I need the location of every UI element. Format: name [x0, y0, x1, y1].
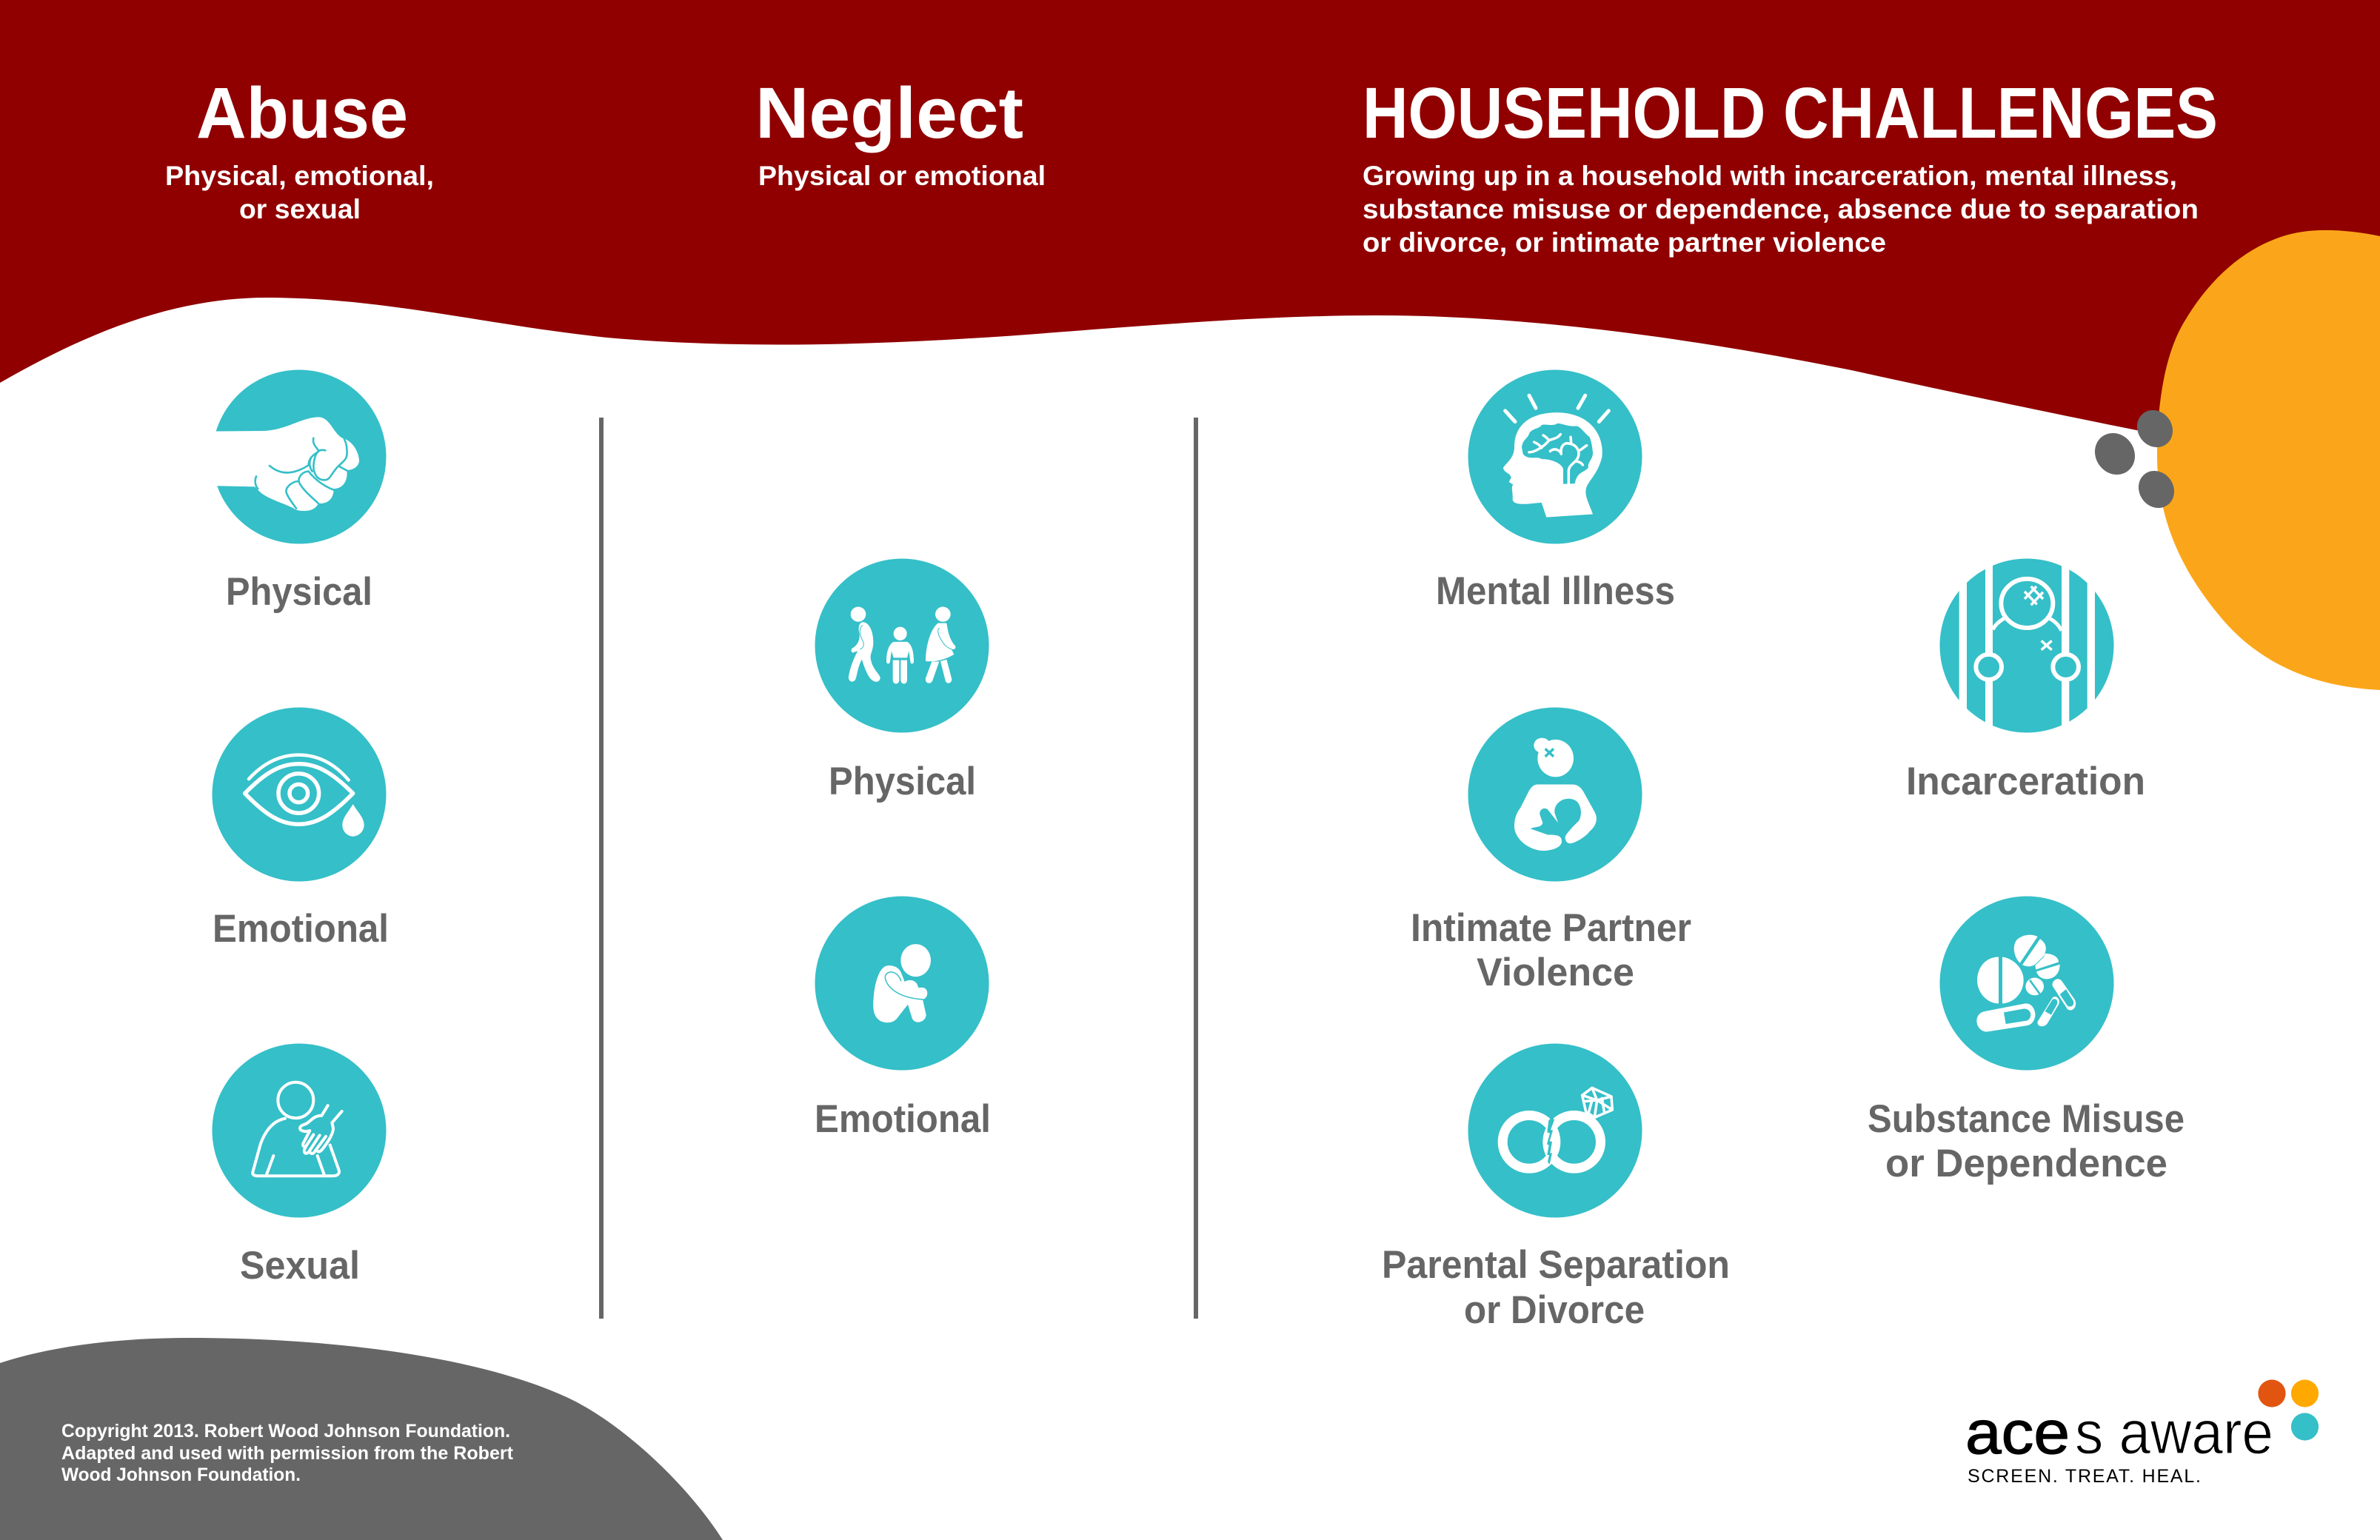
- abuse: sexual: [212, 1044, 387, 1288]
- red header wave: [0, 0, 2380, 444]
- orange blob: [2157, 230, 2380, 690]
- heading: Abuse: [165, 73, 434, 224]
- household: incarceration: [1906, 554, 2145, 803]
- grey dots: [2087, 404, 2182, 515]
- abuse: emotional: [212, 708, 389, 951]
- icon: injured mother holding child: [1468, 708, 1642, 881]
- label: Parental Separation: [1382, 1243, 1730, 1287]
- neglect: emotional: [815, 896, 991, 1141]
- heading: Abuse: or sexual: [239, 194, 361, 224]
- label: Substance Misuse: [1868, 1097, 2185, 1141]
- heading: Neglect: Neglect: [755, 73, 1023, 153]
- icon: walking family: [815, 558, 989, 733]
- abuse: physical: [207, 370, 387, 614]
- icon: person with hand on shoulder: [212, 1044, 387, 1217]
- label: Physical: [226, 570, 372, 614]
- logo dots: [2258, 1379, 2319, 1441]
- icon: person behind bars: [1940, 554, 2113, 734]
- household: substance misuse: [1868, 896, 2185, 1185]
- icon: fist: [207, 370, 387, 543]
- label: Mental Illness: [1436, 569, 1675, 613]
- heading: Household Challenges: HOUSEHOLD CHALLENGES: [1363, 73, 2218, 153]
- neglect: physical: [815, 558, 989, 803]
- label: Emotional: [815, 1097, 991, 1141]
- divider lines: [599, 418, 1198, 1319]
- heading: Abuse: Physical, emotional,: [165, 161, 434, 191]
- heading: Household Challenges: [1363, 73, 2218, 258]
- label: [1382, 1243, 1730, 1332]
- icon: seated child hugging knees: [815, 896, 989, 1071]
- household: mental illness: [1436, 370, 1675, 613]
- logo wordmark: [1965, 1398, 2273, 1467]
- label: Emotional: [213, 907, 389, 951]
- logo wordmark: s aware: [2075, 1398, 2273, 1467]
- label: [1411, 906, 1691, 994]
- heading: Neglect: Physical or emotional: [758, 161, 1046, 191]
- heading: Neglect: [755, 73, 1046, 191]
- label: Intimate Partner: [1411, 906, 1691, 950]
- label: Violence: [1477, 951, 1634, 994]
- heading: Household Challenges: Growing up in a household with incarceration, mental illness,: [1363, 161, 2177, 191]
- icon: head with brain: [1468, 370, 1642, 543]
- logo: ACEs Aware: [1965, 1379, 2319, 1487]
- label: Sexual: [240, 1244, 360, 1288]
- heading: Household Challenges: or divorce, or intimate partner violence: [1363, 227, 1886, 258]
- heading: Household Challenges: substance misuse or dependence, absence due to separation: [1363, 194, 2199, 224]
- icon: pills: [1940, 896, 2113, 1071]
- label: Incarceration: [1906, 760, 2145, 803]
- household: parental separation or divorce: [1382, 1044, 1730, 1332]
- icon: crying eye: [212, 708, 387, 881]
- label: or Dependence: [1885, 1142, 2167, 1185]
- label: [1868, 1097, 2185, 1185]
- copyright text: [61, 1421, 514, 1485]
- icon: broken rings: [1468, 1044, 1642, 1217]
- heading: Abuse: Abuse: [196, 73, 408, 153]
- logo tagline: SCREEN. TREAT. HEAL.: [1968, 1466, 2201, 1487]
- footer: grey copyright panel: [0, 1338, 723, 1540]
- copyright text: Copyright 2013. Robert Wood Johnson Foundation.: [61, 1421, 510, 1442]
- label: or Divorce: [1464, 1288, 1645, 1332]
- label: Physical: [829, 760, 976, 803]
- copyright text: Adapted and used with permission from the Robert: [61, 1443, 514, 1464]
- household: intimate partner violence: [1411, 708, 1691, 994]
- logo wordmark: ace: [1965, 1398, 2070, 1467]
- copyright text: Wood Johnson Foundation.: [61, 1464, 301, 1485]
